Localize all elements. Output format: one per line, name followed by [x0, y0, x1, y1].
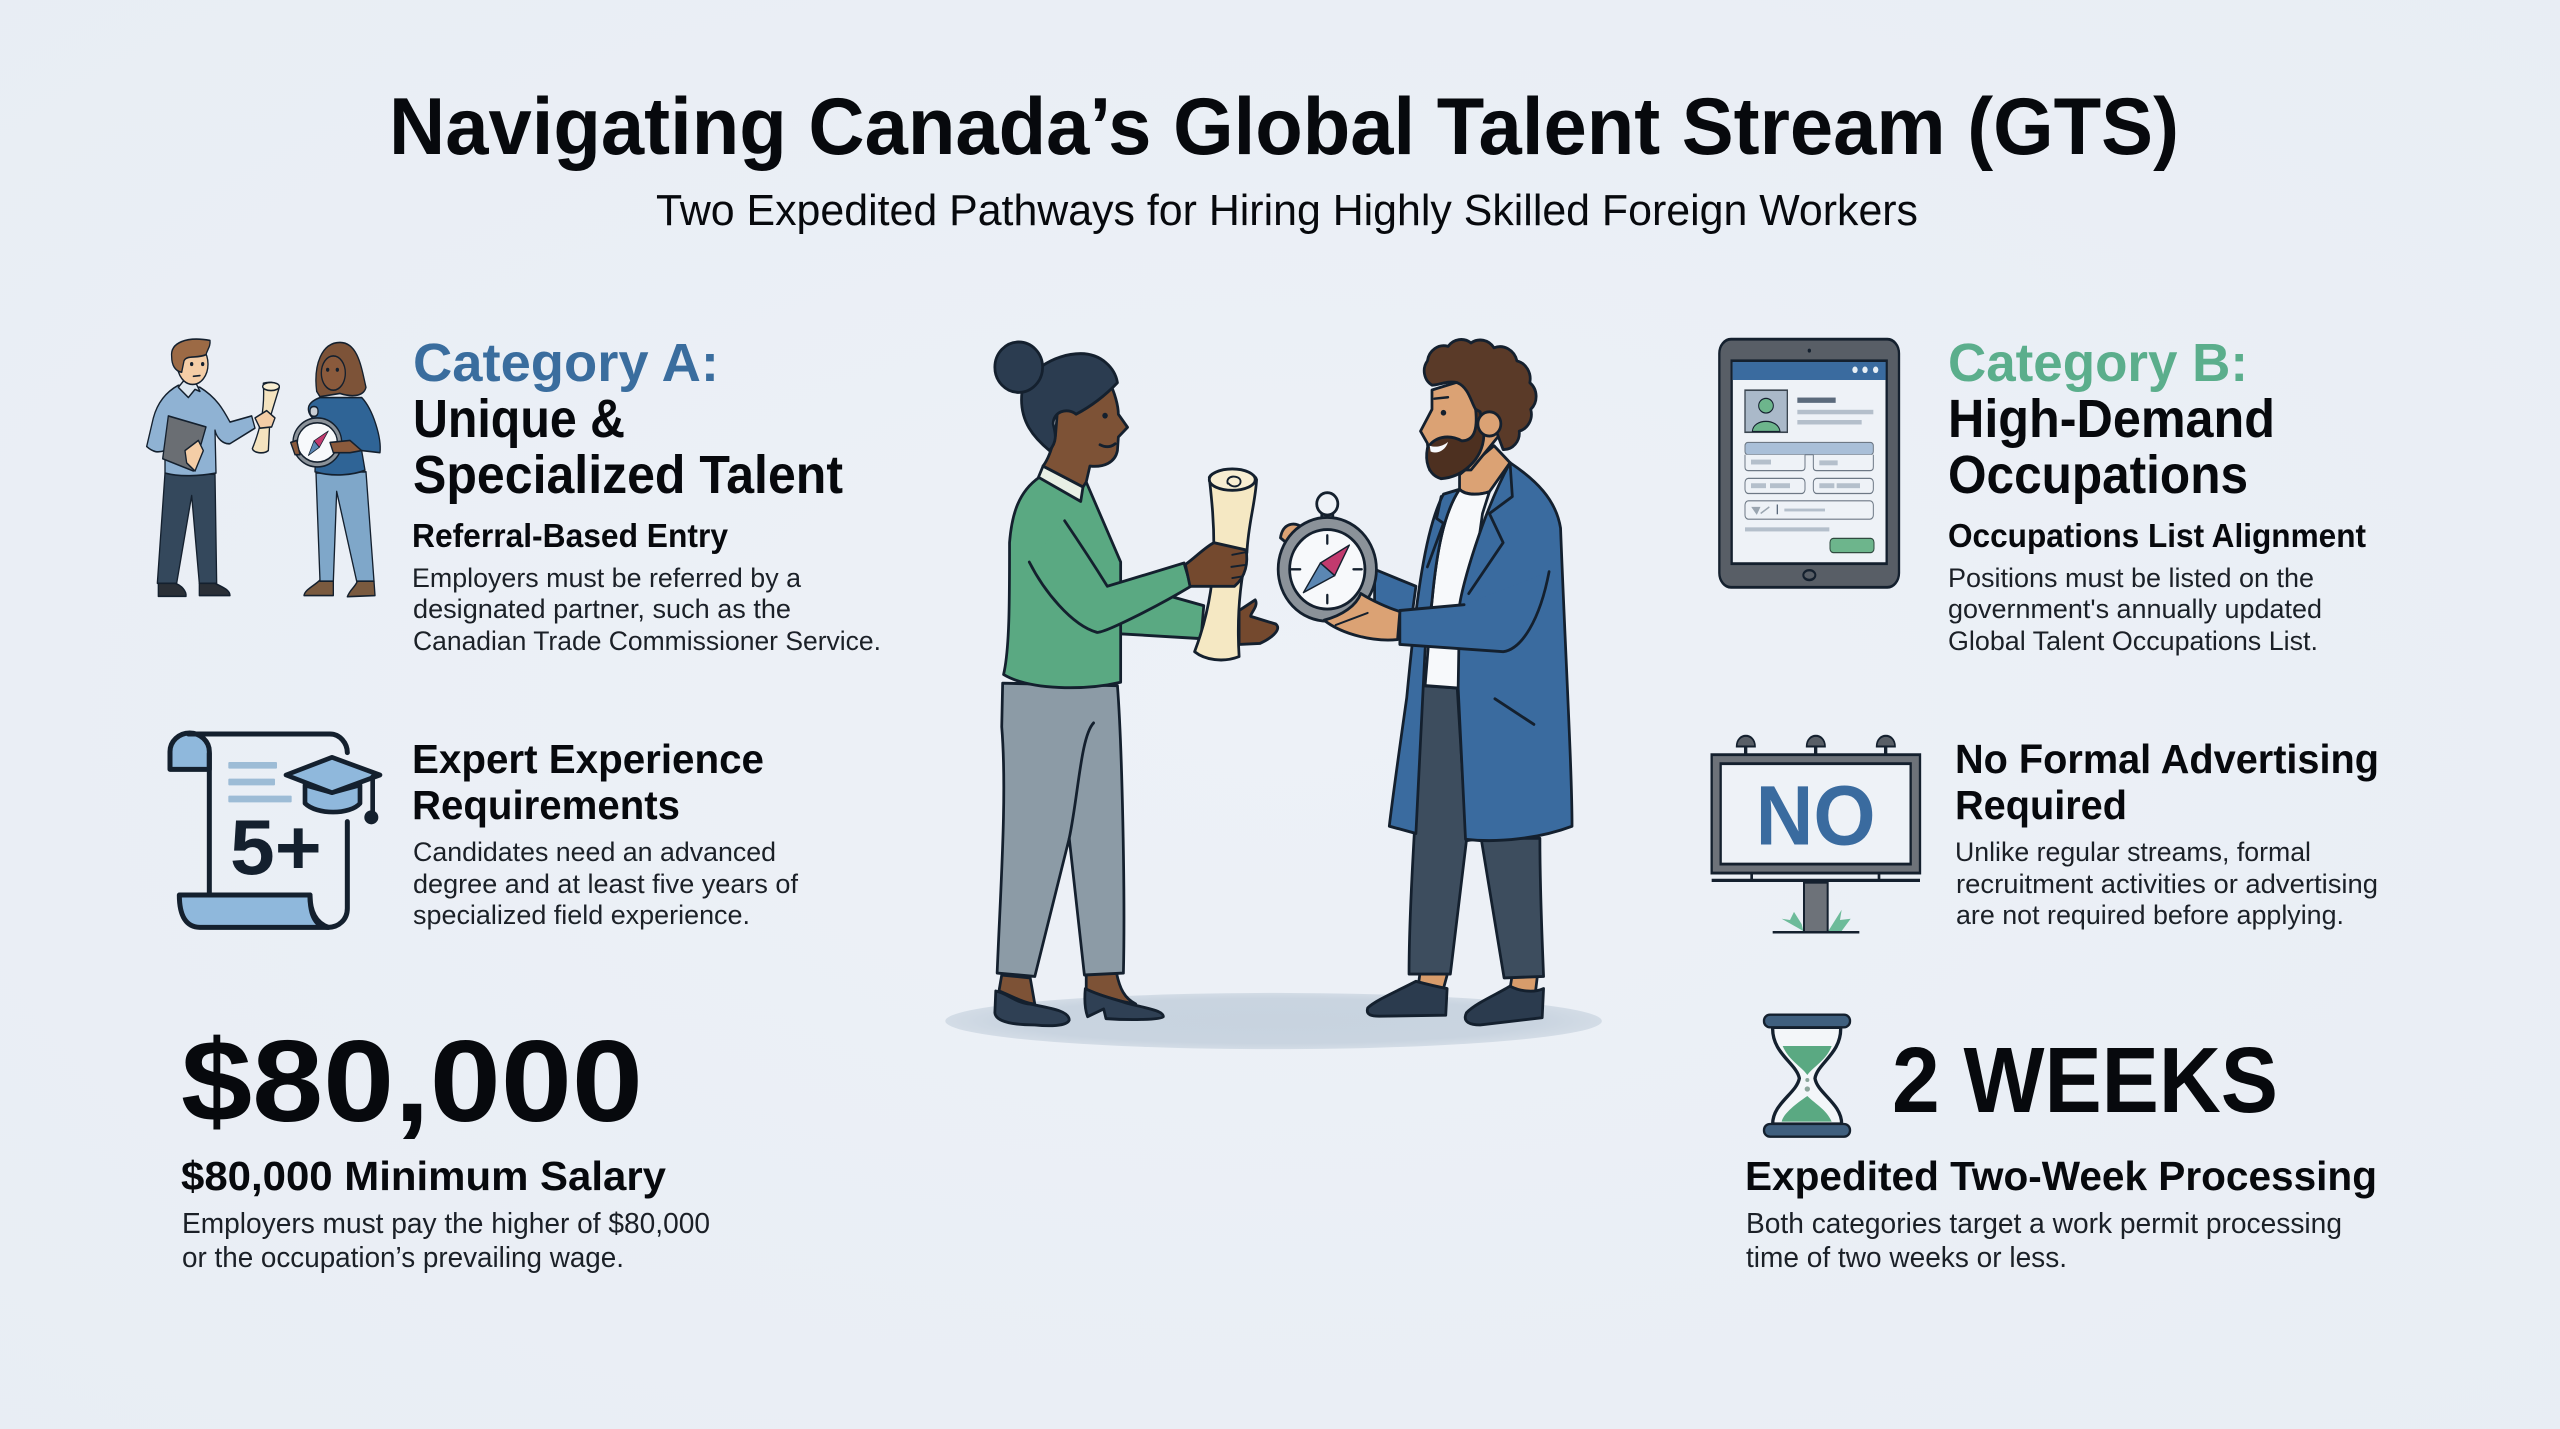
- icon: tablet with application form: [1719, 339, 1899, 587]
- text block: experience description: [413, 837, 798, 930]
- icon: diploma scroll with graduation cap and 5+: [170, 733, 380, 927]
- woman figure: [995, 342, 1278, 1026]
- text block: occupations description: Positions must be listed on the: [1948, 563, 2314, 593]
- panel: Expert Experience: [170, 733, 798, 930]
- text block: experience description: Candidates need an advanced: [413, 837, 776, 867]
- panel: Category A: [147, 333, 881, 656]
- heading: Category A: Category A:: [413, 333, 719, 393]
- heading: Expert Experience Requirements: Expert Experience: [412, 736, 764, 782]
- heading: Expedited Two-Week Processing: Expedited Two-Week Processing: [1745, 1153, 2377, 1199]
- text block: advertising description: recruitment activities or advertising: [1956, 869, 2378, 899]
- big number: 2 WEEKS: 2 WEEKS: [1892, 1028, 2278, 1132]
- heading: $80,000 Minimum Salary: $80,000 Minimum Salary: [181, 1153, 666, 1199]
- text block: advertising description: Unlike regular streams, formal: [1955, 837, 2311, 867]
- text block: processing description: [1746, 1208, 2342, 1274]
- compass: [1278, 493, 1376, 621]
- central illustration: two professionals exchanging a scroll and compass: [945, 340, 1602, 1049]
- text block: advertising description: [1955, 837, 2378, 930]
- text block: experience description: specialized field experience.: [413, 900, 750, 930]
- text block: salary description: Employers must pay the higher of $80,000: [182, 1208, 710, 1240]
- heading: Unique and Specialized Talent: Unique &: [413, 389, 625, 449]
- text block: referral description: [412, 563, 881, 656]
- text block: occupations description: Global Talent Occupations List.: [1948, 626, 2318, 656]
- scroll: [1195, 470, 1257, 660]
- text block: salary description: [182, 1208, 710, 1274]
- icon: two people with scroll and compass: [147, 339, 380, 597]
- label: 5+: 5+: [230, 803, 322, 891]
- text block: processing description: time of two weeks or less.: [1746, 1242, 2067, 1274]
- icon: graduation cap: [286, 757, 380, 822]
- subheading: Referral-Based Entry: Referral-Based Entry: [412, 517, 729, 554]
- text block: occupations description: government's annually updated: [1948, 594, 2322, 624]
- subtitle: Two Expedited Pathways for Hiring Highly Skilled Foreign Workers: [656, 186, 1918, 235]
- heading: High-Demand Occupations: Occupations: [1948, 445, 2248, 505]
- text block: experience description: degree and at least five years of: [413, 869, 798, 899]
- text block: referral description: Canadian Trade Commissioner Service.: [413, 626, 881, 656]
- text block: referral description: Employers must be referred by a: [412, 563, 802, 593]
- heading: No Formal Advertising Required: No Formal Advertising: [1955, 736, 2379, 782]
- heading: No Formal Advertising Required: [1955, 736, 2379, 828]
- heading: High-Demand Occupations: [1948, 389, 2275, 505]
- icon: billboard reading NO: [1712, 736, 1920, 932]
- text block: referral description: designated partner, such as the: [413, 594, 791, 624]
- title: Navigating Canada’s Global Talent Stream (GTS): [389, 82, 2179, 172]
- heading: Expert Experience Requirements: Requirements: [412, 782, 680, 828]
- panel: No Formal Advertising: [1712, 736, 2379, 932]
- text block: processing description: Both categories target a work permit processing: [1746, 1208, 2342, 1240]
- heading: Unique and Specialized Talent: Specialized Talent: [413, 445, 843, 505]
- heading: High-Demand Occupations: High-Demand: [1948, 389, 2275, 449]
- text block: occupations description: [1948, 563, 2322, 656]
- subheading: Occupations List Alignment: Occupations List Alignment: [1948, 517, 2366, 554]
- panel: Minimum Salary: [181, 1016, 710, 1274]
- panel: Category B: [1719, 333, 2366, 656]
- label: NO: NO: [1756, 769, 1876, 863]
- ground shadow: [945, 993, 1602, 1049]
- heading: Expert Experience Requirements: [412, 736, 764, 828]
- big number: $80,000: $80,000: [181, 1016, 643, 1146]
- heading: Unique and Specialized Talent: [413, 389, 843, 505]
- heading: No Formal Advertising Required: Required: [1955, 782, 2127, 828]
- text block: salary description: or the occupation’s prevailing wage.: [182, 1242, 624, 1274]
- man figure: [1278, 340, 1572, 1025]
- panel: Two-Week Processing: [1745, 1015, 2377, 1274]
- text block: advertising description: are not required before applying.: [1956, 900, 2344, 930]
- icon: hourglass: [1764, 1015, 1850, 1137]
- heading: Category B: Category B:: [1948, 333, 2248, 393]
